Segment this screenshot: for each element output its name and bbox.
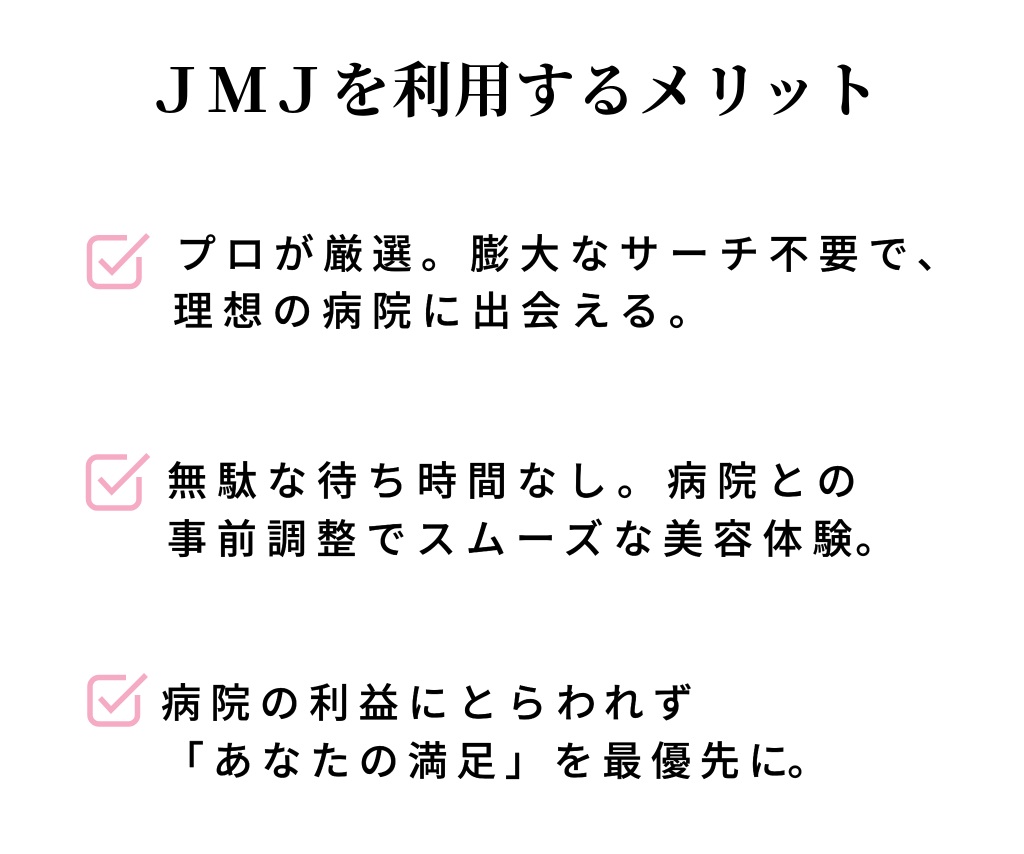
icon: checkbox 3 [87,673,148,727]
benefit 1 text line 2: 理想の病院に出会える。 [173,290,718,334]
benefit 3 text line 2: 「あなたの満足」を最優先に。 [164,740,836,784]
icon: checkbox 1 [86,233,150,290]
icon: checkbox 2 [86,453,150,511]
benefit 2 text: 無駄な待ち時間なし。病院との [167,460,867,504]
title: ＪＭＪを利用するメリット [146,59,882,125]
benefit 2 text line 2: 事前調整でスムーズな美容体験。 [167,518,905,562]
benefit 1 text: プロが厳選。膨大なサーチ不要で、 [176,233,966,277]
benefit 3 text: 病院の利益にとらわれず [161,682,702,726]
